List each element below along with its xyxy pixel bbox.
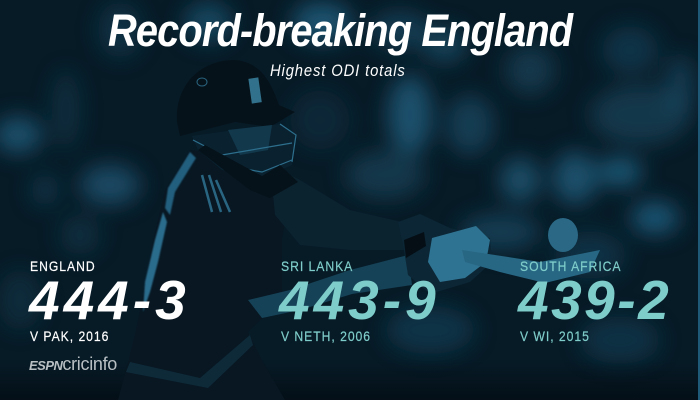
score: 443-9 xyxy=(279,269,440,331)
team name: SRI LANKA xyxy=(281,258,353,274)
batsman xyxy=(118,60,600,400)
lower arm xyxy=(248,255,412,318)
right edge line xyxy=(698,0,700,400)
logo: ESPNcricinfo: ESPNcricinfo xyxy=(29,354,117,374)
sleeve edge strips xyxy=(165,152,196,215)
ball xyxy=(548,218,578,252)
gloves xyxy=(398,214,492,294)
waist xyxy=(126,335,253,388)
stat: Sri Lanka xyxy=(278,258,440,344)
opponent and year: V NETH, 2006 xyxy=(281,328,371,344)
body xyxy=(118,150,290,400)
opponent and year: V PAK, 2016 xyxy=(30,328,109,344)
stat: England xyxy=(28,258,190,344)
team name: ENGLAND xyxy=(30,258,96,274)
shoulder stripes xyxy=(202,175,230,212)
opponent and year: V WI, 2015 xyxy=(520,328,590,344)
score: 439-2 xyxy=(518,269,671,331)
score: 444-3 xyxy=(29,269,190,331)
stat: South Africa xyxy=(517,258,671,344)
subtitle: Highest ODI totals xyxy=(270,61,406,80)
bat xyxy=(462,250,600,283)
helmet xyxy=(177,60,295,136)
upper arm xyxy=(270,165,405,250)
helmet crest xyxy=(248,77,262,104)
bottom vignette xyxy=(0,360,700,400)
face and grille xyxy=(192,124,296,178)
title: Record-breaking England xyxy=(108,5,572,56)
team name: SOUTH AFRICA xyxy=(520,258,621,274)
